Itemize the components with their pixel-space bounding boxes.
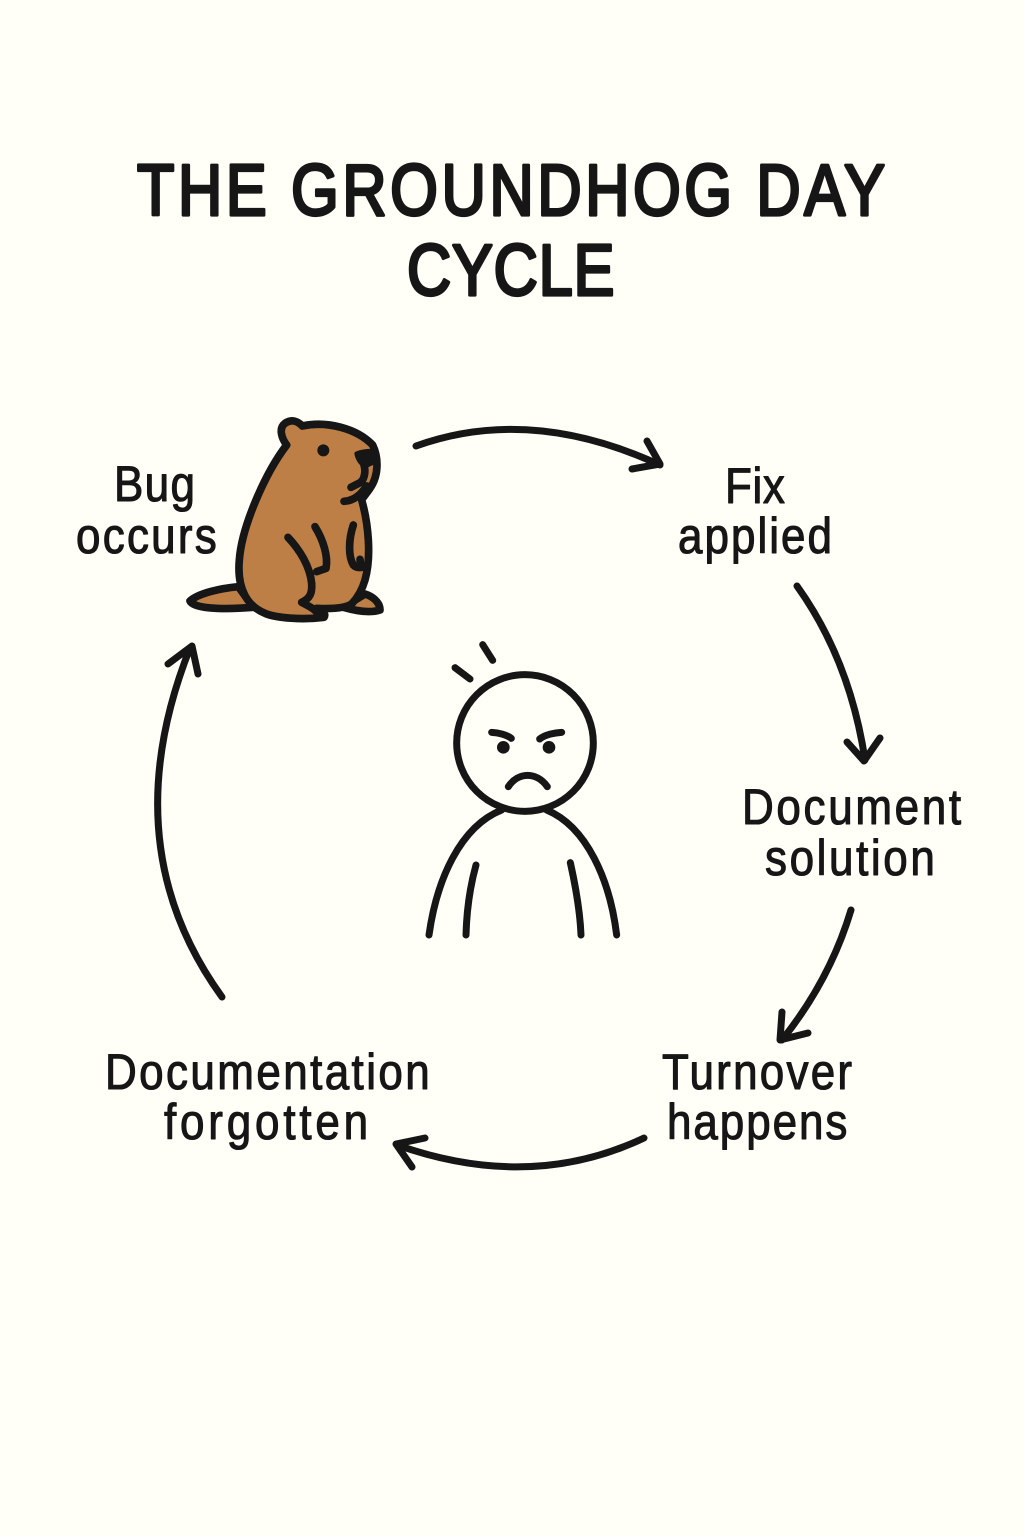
icon: frustrated person [429,645,617,935]
label: bug occurs: occurs [76,507,217,564]
label: bug occurs [76,455,217,564]
groundhog nose [356,450,377,466]
label: document solution [742,778,961,886]
label: document solution: solution [765,829,935,886]
label: bug occurs: Bug [114,455,195,512]
title: CYCLE [407,231,614,311]
groundhog tail [190,587,253,609]
title [137,151,885,311]
groundhog body [239,421,377,619]
icon: groundhog [190,421,380,619]
label: document solution: Document [742,778,961,835]
eyebrows [492,732,562,739]
label: fix applied: applied [678,507,832,564]
eyes [497,741,510,754]
arrow: forgotten to bug [158,646,222,997]
stress marks [455,645,493,679]
arrow: document to turnover [780,910,851,1040]
inner arms [466,863,581,935]
label: fix applied: Fix [725,457,785,514]
label: turnover happens: Turnover [662,1043,852,1100]
title: THE GROUNDHOG DAY [137,151,885,231]
arrow: turnover to forgotten [396,1138,644,1167]
shoulders and outer arms [429,810,617,935]
arrow: bug to fix [416,429,660,469]
groundhog back foot [343,594,380,612]
groundhog left arm [288,527,327,615]
label: documentation forgotten: Documentation [105,1043,430,1100]
label: documentation forgotten: forgotten [164,1093,368,1150]
arrow: fix to document [797,586,880,761]
groundhog eye [317,444,329,456]
label: turnover happens [662,1043,852,1150]
frown [508,775,547,787]
head [457,675,593,811]
label: turnover happens: happens [667,1093,847,1150]
groundhog right arm [350,525,367,567]
label: documentation forgotten [105,1043,430,1150]
groundhog mouth [344,465,367,501]
label: fix applied [678,457,832,564]
